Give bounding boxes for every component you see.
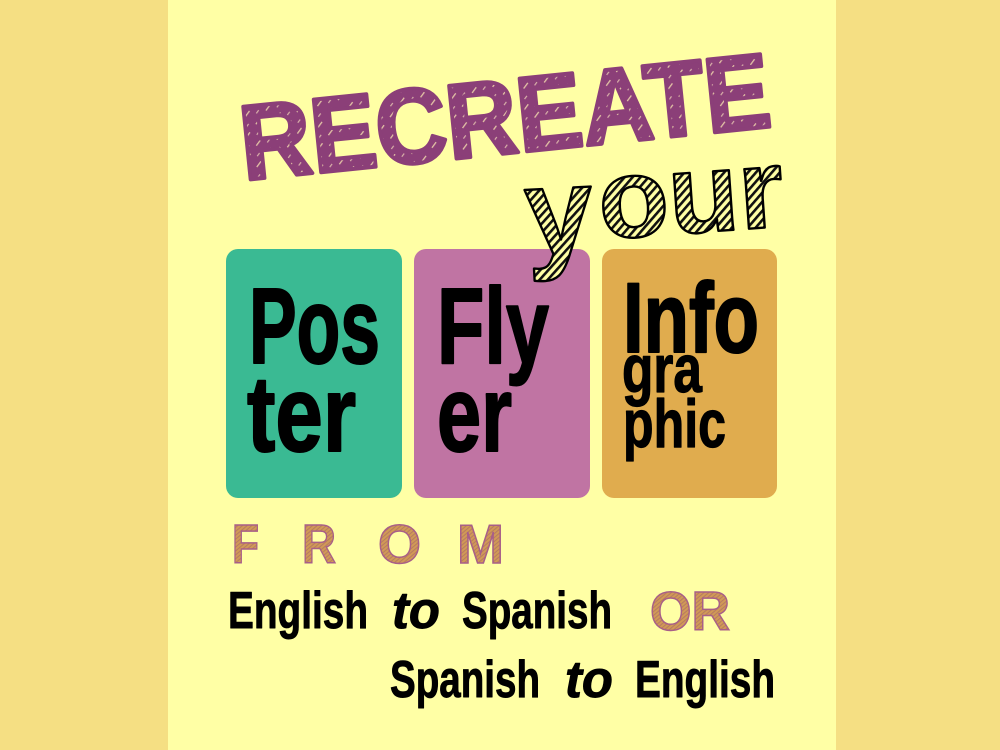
text: Spanish to English: English: [635, 651, 775, 709]
text: Spanish to English: to: [565, 651, 613, 709]
heading: Fly: Fly: [437, 265, 549, 386]
heading: FROM: O: [378, 513, 421, 575]
title: your: y: [521, 141, 596, 283]
background: [168, 0, 836, 750]
title: RECREATE: RECREATE: [234, 32, 776, 203]
text: English to Spanish: [228, 582, 612, 640]
heading: FROM: F: [232, 513, 259, 575]
text: Spanish to English: [390, 651, 775, 709]
heading: Pos: Pos: [249, 265, 380, 386]
heading: phic: phic: [623, 386, 726, 462]
heading: FROM: R: [302, 513, 336, 575]
title: your: [521, 124, 787, 283]
label: OR: OR: [650, 580, 730, 642]
heading: gra: gra: [622, 331, 703, 407]
text: English to Spanish: English: [228, 582, 368, 640]
heading: FROM: [232, 513, 504, 575]
heading: Info: Info: [623, 262, 759, 373]
panel: poster: [226, 249, 402, 498]
panel: infographic: [602, 249, 777, 498]
heading: ter: ter: [247, 353, 356, 474]
panel: flyer: [414, 249, 590, 498]
heading: er: er: [437, 353, 512, 474]
text: English to Spanish: to: [392, 582, 440, 640]
text: Spanish to English: Spanish: [390, 651, 540, 709]
text: English to Spanish: Spanish: [462, 582, 612, 640]
heading: FROM: M: [457, 513, 504, 575]
title: your: our: [594, 124, 787, 263]
